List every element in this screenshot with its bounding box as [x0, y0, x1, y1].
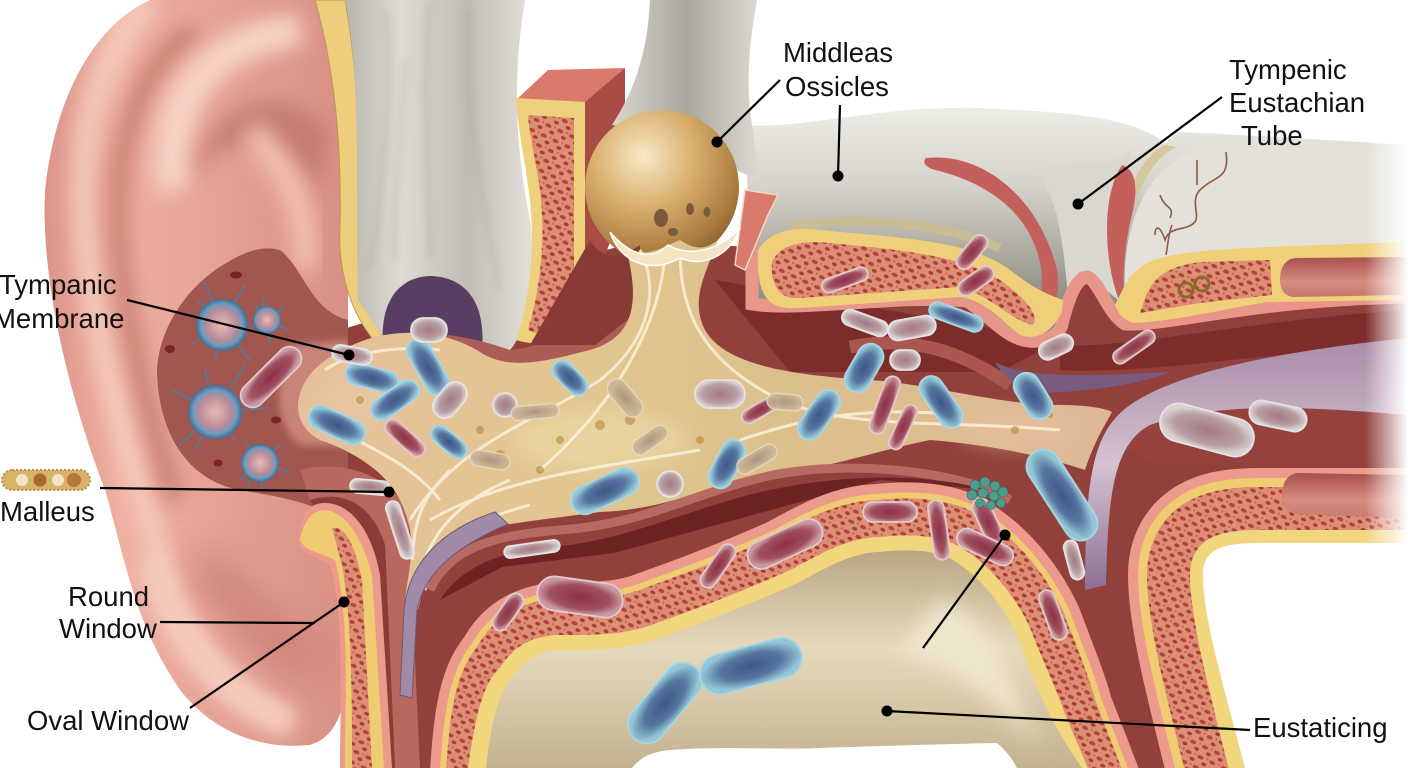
label: Eustaticing: Eustaticing: [1253, 712, 1388, 743]
rose tube: [1280, 257, 1408, 297]
right yellow bone with spongy core: [1115, 242, 1408, 323]
branching vessels: [1155, 152, 1227, 255]
golden ring: [1179, 277, 1209, 297]
lower-right bone: [1203, 543, 1408, 768]
bacteria scattered through the section: [236, 232, 1309, 751]
red bacteria: [236, 232, 1158, 642]
dark cavity shading: [715, 280, 1408, 462]
upper yellow bone with spongy core: [758, 221, 1063, 337]
label: Round Window: Window: [59, 613, 157, 644]
lower arch inner chamber: [486, 550, 1082, 768]
blue bacteria: [305, 300, 1104, 751]
label: Malleus: Malleus: [0, 496, 95, 527]
white opening: [632, 743, 1017, 768]
tan bacteria: [469, 375, 804, 477]
label: Tympanic Membrane: Tympanic: [0, 269, 117, 300]
upper grey column above sphere: [612, 0, 760, 180]
pink-yellow bone block: [516, 68, 625, 345]
label: Tympenic Eustachian Tube: Tube: [1241, 120, 1303, 151]
purple arch: [383, 276, 500, 370]
fluid tint patches: [315, 370, 1080, 470]
infected fluid mass: [298, 228, 1112, 610]
label: Tympenic Eustachian Tube: Eustachian: [1229, 87, 1365, 118]
label: Round Window: Round: [68, 581, 149, 612]
upper pink membrane: [752, 245, 1408, 341]
left lower bony wall: [298, 467, 420, 768]
purple tube right: [995, 338, 1408, 590]
grey translucent bacteria: [331, 307, 1309, 581]
lower-right white opening and rose tube: [1203, 473, 1408, 768]
grey horizontal temporal bone: [745, 108, 1408, 341]
grey temporal column: [315, 0, 532, 370]
central cavity background: [340, 240, 1408, 768]
concha hollow: [157, 248, 348, 510]
label: Middleas Ossicles: Middleas: [783, 37, 893, 68]
label: Tympenic Eustachian Tube: Tympenic: [1229, 54, 1347, 85]
lower arch bone: [480, 550, 1085, 768]
pink tissue left of fluid: [340, 280, 650, 400]
yellow edge strip: [315, 0, 385, 340]
purple tube left: [400, 512, 508, 698]
spiky immune cells: [172, 283, 290, 490]
leader lines and dots: [100, 80, 1250, 730]
middle ossicle sphere: [585, 110, 778, 270]
lower membrane band under fluid: [430, 468, 1010, 590]
red curved canal: [924, 157, 1058, 334]
label: Oval Window: Oval Window: [27, 705, 189, 736]
right edge fade: [1365, 130, 1408, 555]
malleus chain icon: [2, 470, 90, 490]
red narrow canal: [1107, 165, 1135, 310]
fluid highlights: [310, 250, 1060, 595]
helix shading: [83, 0, 290, 720]
concha pits: [165, 272, 281, 466]
outer ear (pinna): [44, 0, 348, 746]
green cluster: [967, 477, 1008, 510]
label: Middleas Ossicles: Ossicles: [785, 71, 889, 102]
